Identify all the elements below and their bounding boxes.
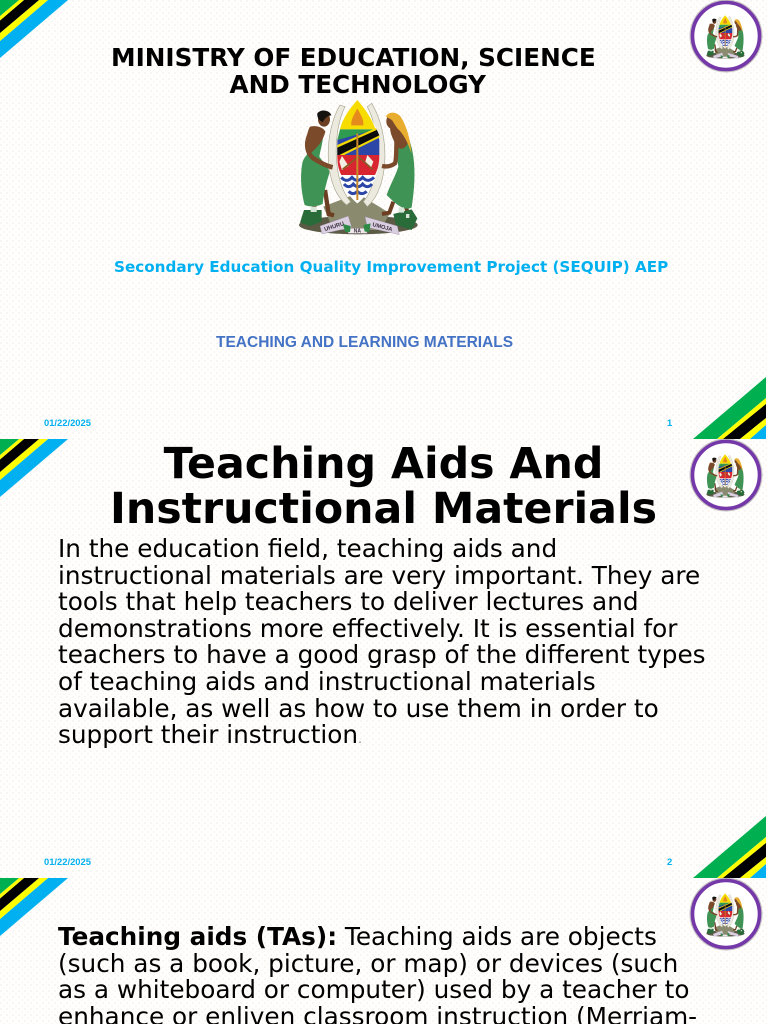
slide 1 corner flag top-left <box>0 0 68 58</box>
slide 2 body text: demonstrations more effectively. It is essential for <box>58 614 677 643</box>
slide 2 heading <box>110 439 657 534</box>
slide 3 body text: as a whiteboard or computer) used by a teacher to <box>58 975 689 1004</box>
slide 3 body text <box>58 923 697 1024</box>
slide 1 ministry heading: MINISTRY OF EDUCATION, SCIENCE <box>111 43 596 72</box>
slide 2 body text: tools that help teachers to deliver lectures and <box>58 587 639 616</box>
slide 1 ministry heading <box>111 43 596 99</box>
slide 1 corner flag bottom-right <box>693 377 766 439</box>
project subtitle: Secondary Education Quality Improvement Project (SEQUIP) AEP <box>114 258 668 276</box>
slide 2 date: 01/22/2025 <box>44 856 91 867</box>
national coat of arms: UHURU <box>324 221 345 233</box>
national coat of arms <box>299 100 418 235</box>
slide 2 heading: Instructional Materials <box>110 484 657 534</box>
slide 2 body text: available, as well as how to use them in order to <box>58 694 659 723</box>
presentation topic: TEACHING AND LEARNING MATERIALS <box>216 334 513 351</box>
slide 1 number: 1 <box>667 417 672 428</box>
slide 2 corner flag bottom-right <box>693 816 766 878</box>
slide 2 heading: Teaching Aids And <box>164 439 603 489</box>
slide 2 body text <box>58 534 706 749</box>
slide 3 emblem badge <box>690 878 762 950</box>
national coat of arms: NA <box>354 229 361 235</box>
slide 2 number: 2 <box>667 856 672 867</box>
slide 2 body text: In the education field, teaching aids and <box>58 534 557 563</box>
slide 3 corner flag top-left <box>0 878 68 936</box>
slide 1 emblem badge <box>690 0 762 72</box>
national coat of arms: UMOJA <box>372 222 393 233</box>
slide 2 emblem badge <box>690 438 762 512</box>
slide 1 date: 01/22/2025 <box>44 417 91 428</box>
slide 2 body text: instructional materials are very important. They are <box>58 561 700 590</box>
slide 2 body text: teachers to have a good grasp of the different types <box>58 640 706 669</box>
slide 1 ministry heading: AND TECHNOLOGY <box>230 70 486 99</box>
slide 3 body text: (such as a book, picture, or map) or devices (such <box>58 949 678 978</box>
slide 2 body text: of teaching aids and instructional materials <box>58 667 596 696</box>
slide 2 corner flag top-left <box>0 439 68 497</box>
slide 2 body text: support their instruction. <box>58 720 362 749</box>
